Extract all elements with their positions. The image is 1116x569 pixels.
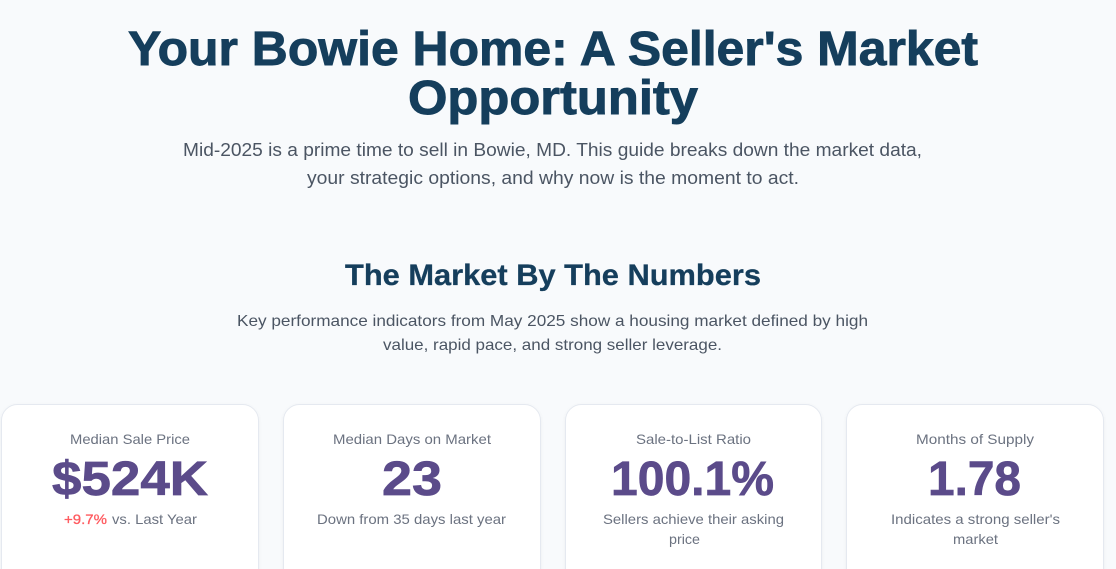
section description: Key performance indicators from May 2025 show a housing market defined by high [237,313,868,330]
panel: sale-to-list ratio [566,404,822,569]
panel: sale-to-list ratio: price [669,531,700,547]
title: Your Bowie Home: A Seller's Market [128,23,978,76]
panel: months of supply: Months of Supply [916,431,1034,447]
section description: value, rapid pace, and strong seller leverage. [383,337,722,354]
panel: months of supply: market [953,531,998,547]
section heading: The Market By The Numbers [345,259,761,292]
panel: median sale price: vs. Last Year [112,511,197,527]
intro text: your strategic options, and why now is the moment to act. [307,168,799,188]
panel: median days on market: Down from 35 days last year [317,511,506,527]
panel: months of supply: Indicates a strong seller's [891,511,1060,527]
panel: median sale price [2,404,258,569]
section description [237,313,868,354]
panel: median days on market: 23 [382,453,442,506]
title: Opportunity [408,72,698,125]
panel: sale-to-list ratio: Sale-to-List Ratio [636,431,751,447]
intro text [183,140,922,188]
panel: median sale price: Median Sale Price [70,431,190,447]
intro text: Mid-2025 is a prime time to sell in Bowie, MD. This guide breaks down the market data, [183,140,922,160]
panel: sale-to-list ratio: 100.1% [611,453,774,506]
panel: months of supply [846,404,1104,569]
panel: median days on market [284,404,540,569]
panel: median sale price: +9.7% [64,511,107,527]
panel: median days on market: Median Days on Market [333,431,491,447]
panel: sale-to-list ratio: Sellers achieve their asking [603,511,784,527]
panel: months of supply: 1.78 [928,453,1021,506]
title [128,23,978,125]
panel: median sale price: $524K [52,453,208,506]
